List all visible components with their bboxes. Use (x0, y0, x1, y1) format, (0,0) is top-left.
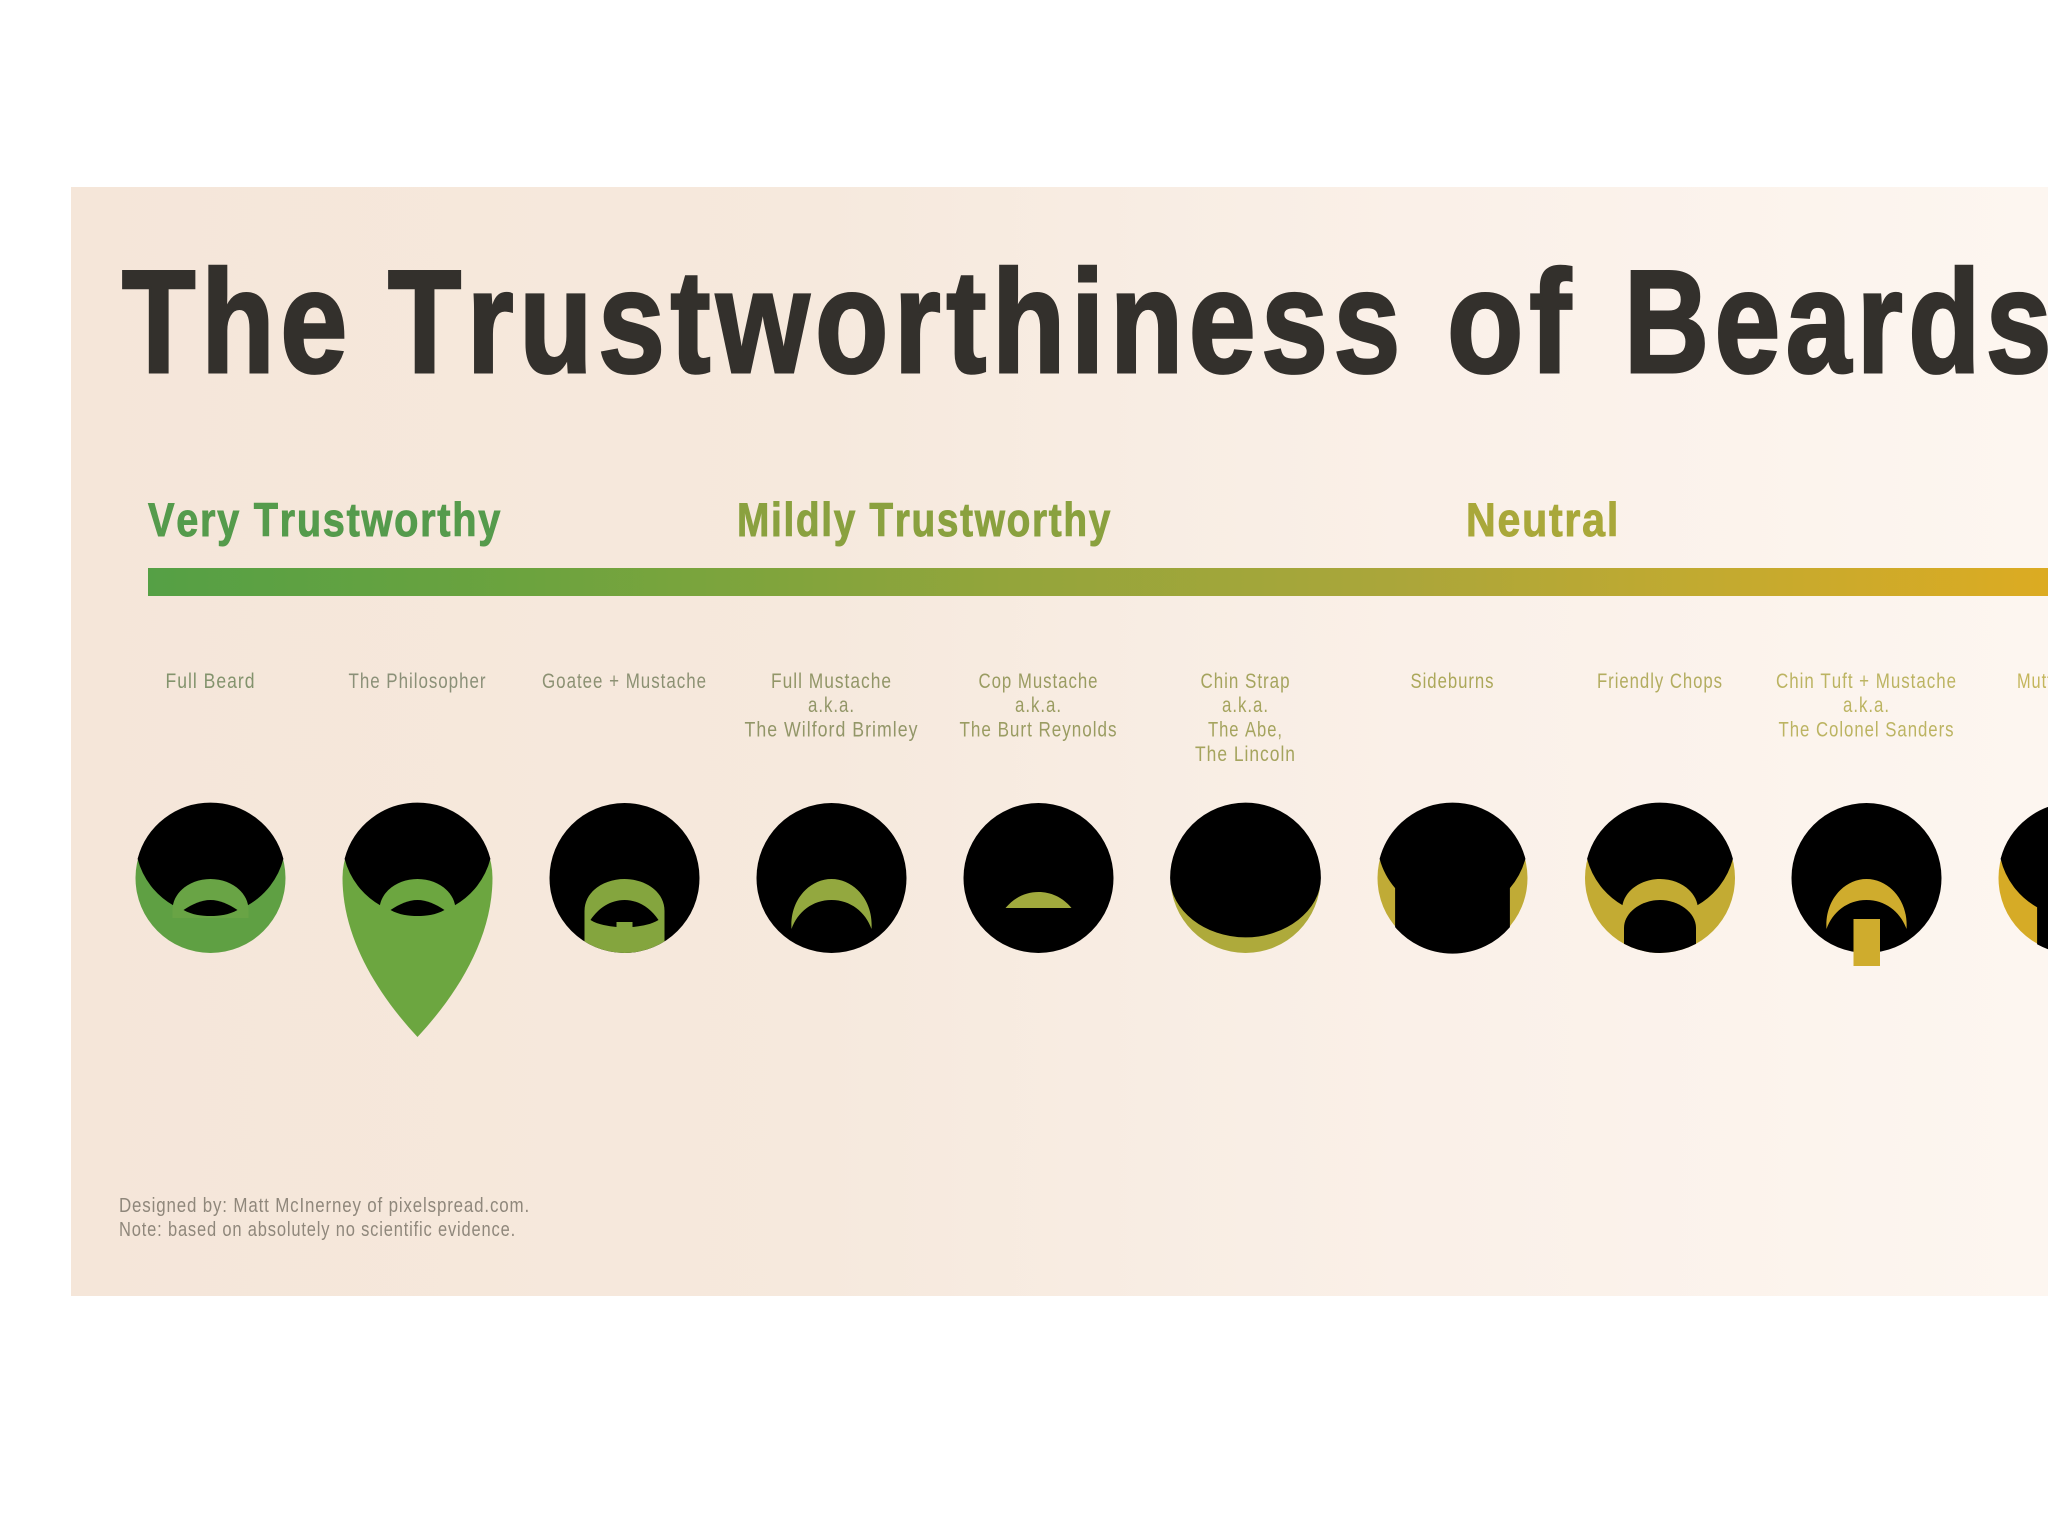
item: Friendly Chops (1585, 670, 1735, 958)
item: The Philosopher (342, 670, 492, 1037)
title: of (1447, 240, 1577, 403)
label: Cop Mustache a.k.a. The Burt Reynolds: Cop Mustache (978, 670, 1098, 693)
icon: goatee and mustache (550, 803, 700, 958)
panel: background (71, 187, 2048, 1296)
label: Chin Tuft + Mustache a.k.a. The Colonel Sanders: The Colonel Sanders (1778, 718, 1954, 742)
icon: friendly chops (1585, 803, 1735, 958)
icon: full mustache (756, 803, 906, 953)
icon: the philosopher beard (342, 803, 492, 1037)
item: Cop Mustache (960, 670, 1118, 953)
label: Chin Tuft + Mustache a.k.a. The Colonel Sanders (1776, 670, 1957, 742)
icon: mutton chops (1998, 803, 2048, 953)
label: Sideburns: Sideburns (1410, 670, 1494, 693)
label: Chin Strap a.k.a. The Abe, The Lincoln (1195, 670, 1296, 766)
label: Chin Tuft + Mustache a.k.a. The Colonel Sanders: a.k.a. (1843, 694, 1890, 717)
label: Chin Tuft + Mustache a.k.a. The Colonel Sanders: Chin Tuft + Mustache (1776, 670, 1957, 693)
label: Cop Mustache a.k.a. The Burt Reynolds (960, 670, 1118, 742)
item: Chin Strap (1170, 670, 1320, 953)
gradient scale bar (148, 568, 2048, 596)
label: Full Beard: Full Beard (166, 670, 256, 693)
title (122, 240, 2048, 403)
label: Full Mustache a.k.a. The Wilford Brimley: Full Mustache (771, 670, 892, 693)
item: Full Mustache (744, 670, 918, 953)
item: Goatee + Mustache (542, 670, 707, 958)
title: The (122, 240, 353, 403)
label: Chin Strap a.k.a. The Abe, The Lincoln: a.k.a. (1222, 694, 1269, 717)
label: Full Mustache a.k.a. The Wilford Brimley: The Wilford Brimley (744, 718, 918, 742)
heading: Mildly Trustworthy: Mildly Trustworthy (737, 493, 1112, 546)
icon: chin strap (1170, 803, 1320, 953)
icon: sideburns (1378, 803, 1528, 953)
footer credit note: Note: based on absolutely no scientific evidence. (119, 1219, 516, 1241)
label: The Philosopher: The Philosopher (348, 670, 486, 693)
icon: chin tuft and mustache (1792, 803, 1942, 966)
heading: Very Trustworthy: Very Trustworthy (148, 493, 502, 546)
footer credit note (119, 1195, 530, 1241)
label: Cop Mustache a.k.a. The Burt Reynolds: The Burt Reynolds (960, 718, 1118, 742)
item: Mutton Chops (cropped) (1998, 670, 2048, 953)
icon: cop mustache (964, 803, 1114, 953)
heading: Neutral: Neutral (1466, 493, 1620, 546)
label: Chin Strap a.k.a. The Abe, The Lincoln: The Lincoln (1195, 743, 1296, 766)
item: Full Beard (136, 670, 286, 953)
label: Chin Strap a.k.a. The Abe, The Lincoln: The Abe, (1208, 718, 1283, 742)
title: Trustworthiness (388, 240, 1406, 403)
label: Goatee + Mustache: Goatee + Mustache (542, 670, 707, 693)
item: Sideburns (1378, 670, 1528, 953)
item: Chin Tuft + Mustache (1776, 670, 1957, 966)
label: Cop Mustache a.k.a. The Burt Reynolds: a.k.a. (1015, 694, 1062, 717)
footer credit note: Designed by: Matt McInerney of pixelspread.com. (119, 1195, 530, 1217)
label: Full Mustache a.k.a. The Wilford Brimley: a.k.a. (808, 694, 855, 717)
label: Friendly Chops: Friendly Chops (1597, 670, 1723, 693)
icon: full beard (136, 803, 286, 953)
label: Full Mustache a.k.a. The Wilford Brimley (744, 670, 918, 742)
label: Chin Strap a.k.a. The Abe, The Lincoln: Chin Strap (1200, 670, 1290, 693)
